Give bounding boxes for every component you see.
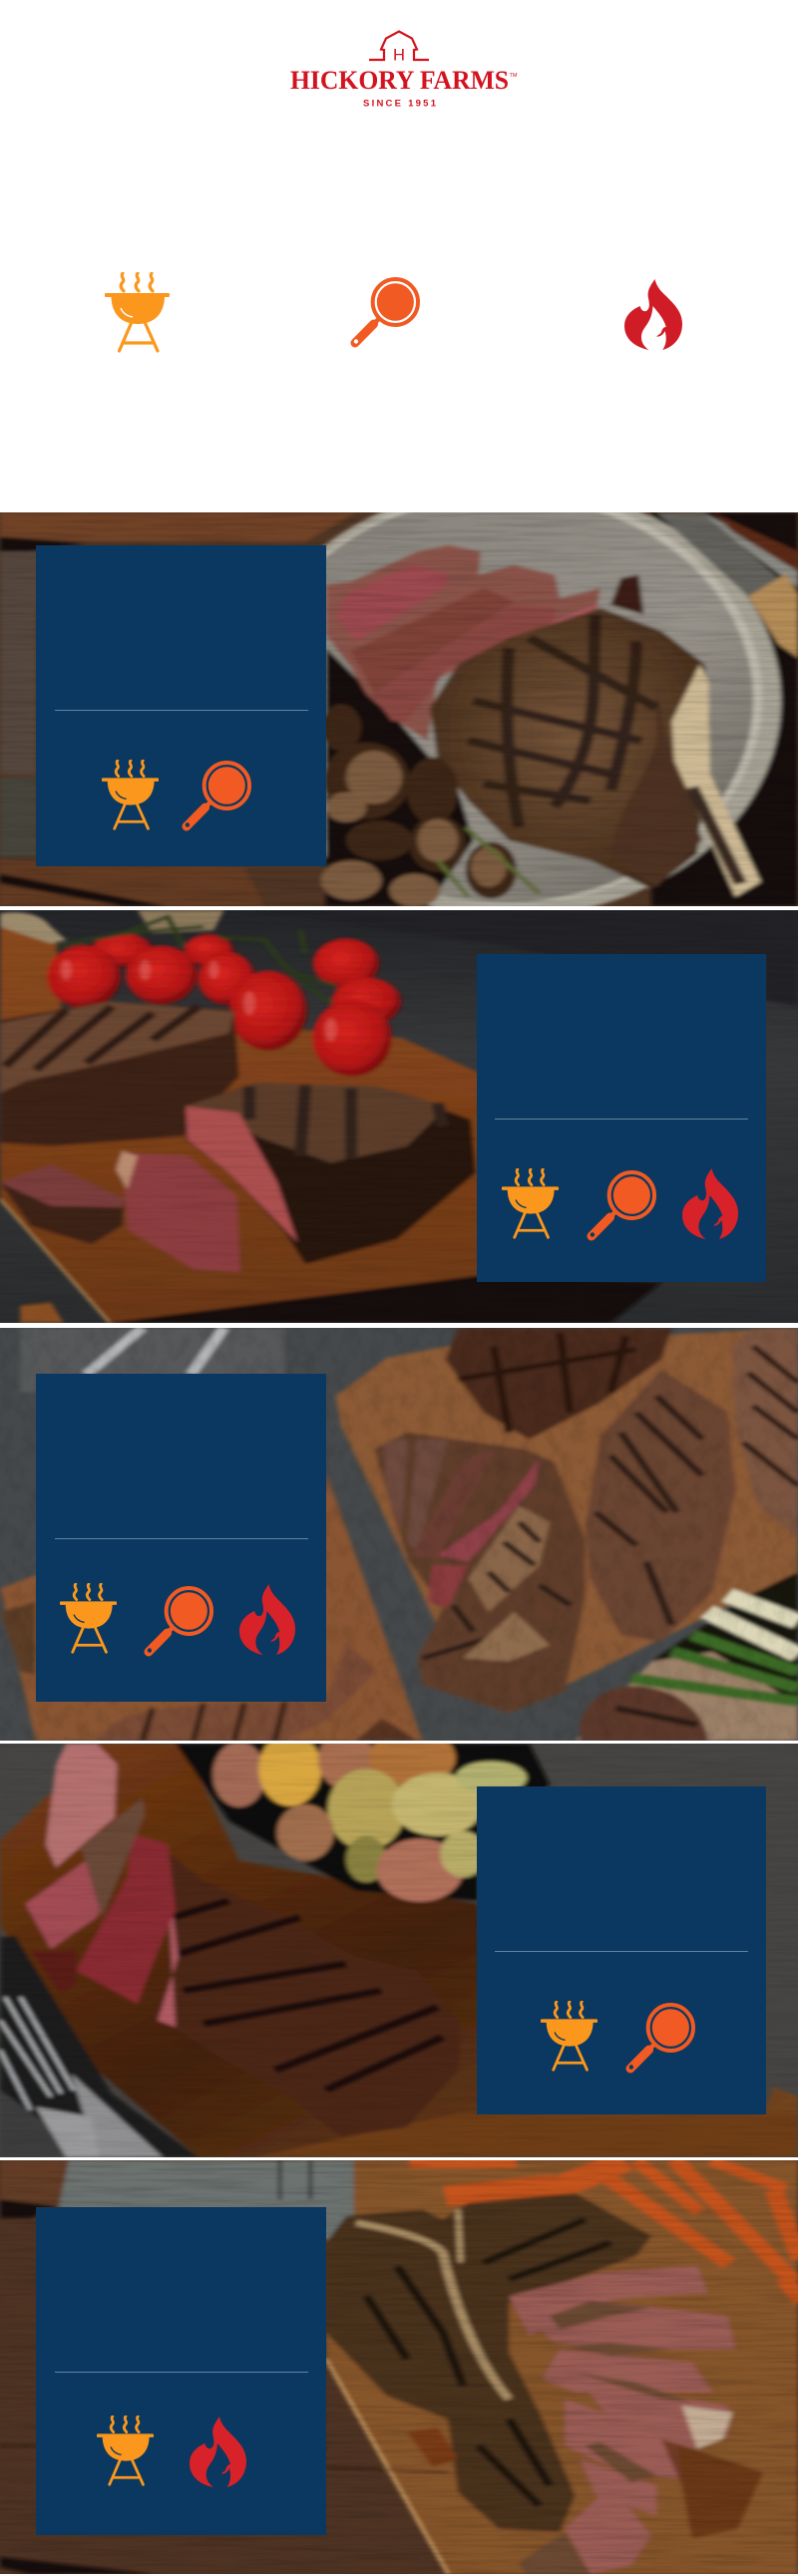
logo wordmark: HICKORY FARMS bbox=[290, 66, 509, 95]
logo barn letter: H bbox=[393, 46, 405, 64]
photo: grilled ribeyes on boards bbox=[0, 1328, 798, 1741]
section: new york strip bbox=[0, 1744, 798, 2157]
photo: sliced T-bone with sweet potato fries bbox=[0, 2160, 798, 2574]
icon: skillet bbox=[144, 1586, 213, 1657]
divider bbox=[55, 2372, 308, 2373]
section: grilled ribeyes bbox=[0, 1328, 798, 1741]
divider bbox=[55, 1538, 308, 1539]
panel: ribeyes info card bbox=[36, 1374, 326, 1702]
divider bbox=[55, 710, 308, 711]
photo: filet mignon with tomatoes bbox=[0, 910, 798, 1323]
icon: grill legend bbox=[105, 272, 170, 353]
icon: flame bbox=[190, 2416, 246, 2487]
icon: grill bbox=[60, 1583, 117, 1654]
icon: flame bbox=[682, 1168, 738, 1239]
icon: flame legend bbox=[624, 279, 682, 350]
logo tagline: SINCE 1951 bbox=[363, 98, 437, 110]
section: cowboy ribeye bbox=[0, 512, 798, 906]
logo: Hickory Farms bbox=[290, 30, 517, 110]
section: filet mignon bbox=[0, 910, 798, 1323]
icon: grill bbox=[502, 1168, 559, 1239]
photo: bone-in ribeye on a pan with mushrooms bbox=[0, 512, 798, 906]
panel: porterhouse info card bbox=[36, 2207, 326, 2535]
icon: skillet bbox=[182, 761, 251, 831]
icon: grill bbox=[97, 2415, 154, 2486]
panel: filet info card bbox=[477, 954, 766, 1282]
panel: ribeye info card bbox=[36, 545, 326, 866]
logo trademark: TM bbox=[509, 73, 517, 79]
section: porterhouse bbox=[0, 2160, 798, 2574]
divider bbox=[495, 1119, 748, 1120]
icon: grill bbox=[541, 2001, 598, 2072]
icon: grill bbox=[102, 760, 159, 830]
icon: flame bbox=[239, 1584, 295, 1655]
icon: skillet bbox=[587, 1170, 656, 1240]
logo barn mark bbox=[369, 32, 429, 60]
photo: strip steak with potatoes bbox=[0, 1744, 798, 2157]
icon: skillet legend bbox=[351, 277, 420, 347]
panel: strip info card bbox=[477, 1786, 766, 2114]
divider bbox=[495, 1951, 748, 1952]
icon: skillet bbox=[626, 2003, 695, 2074]
